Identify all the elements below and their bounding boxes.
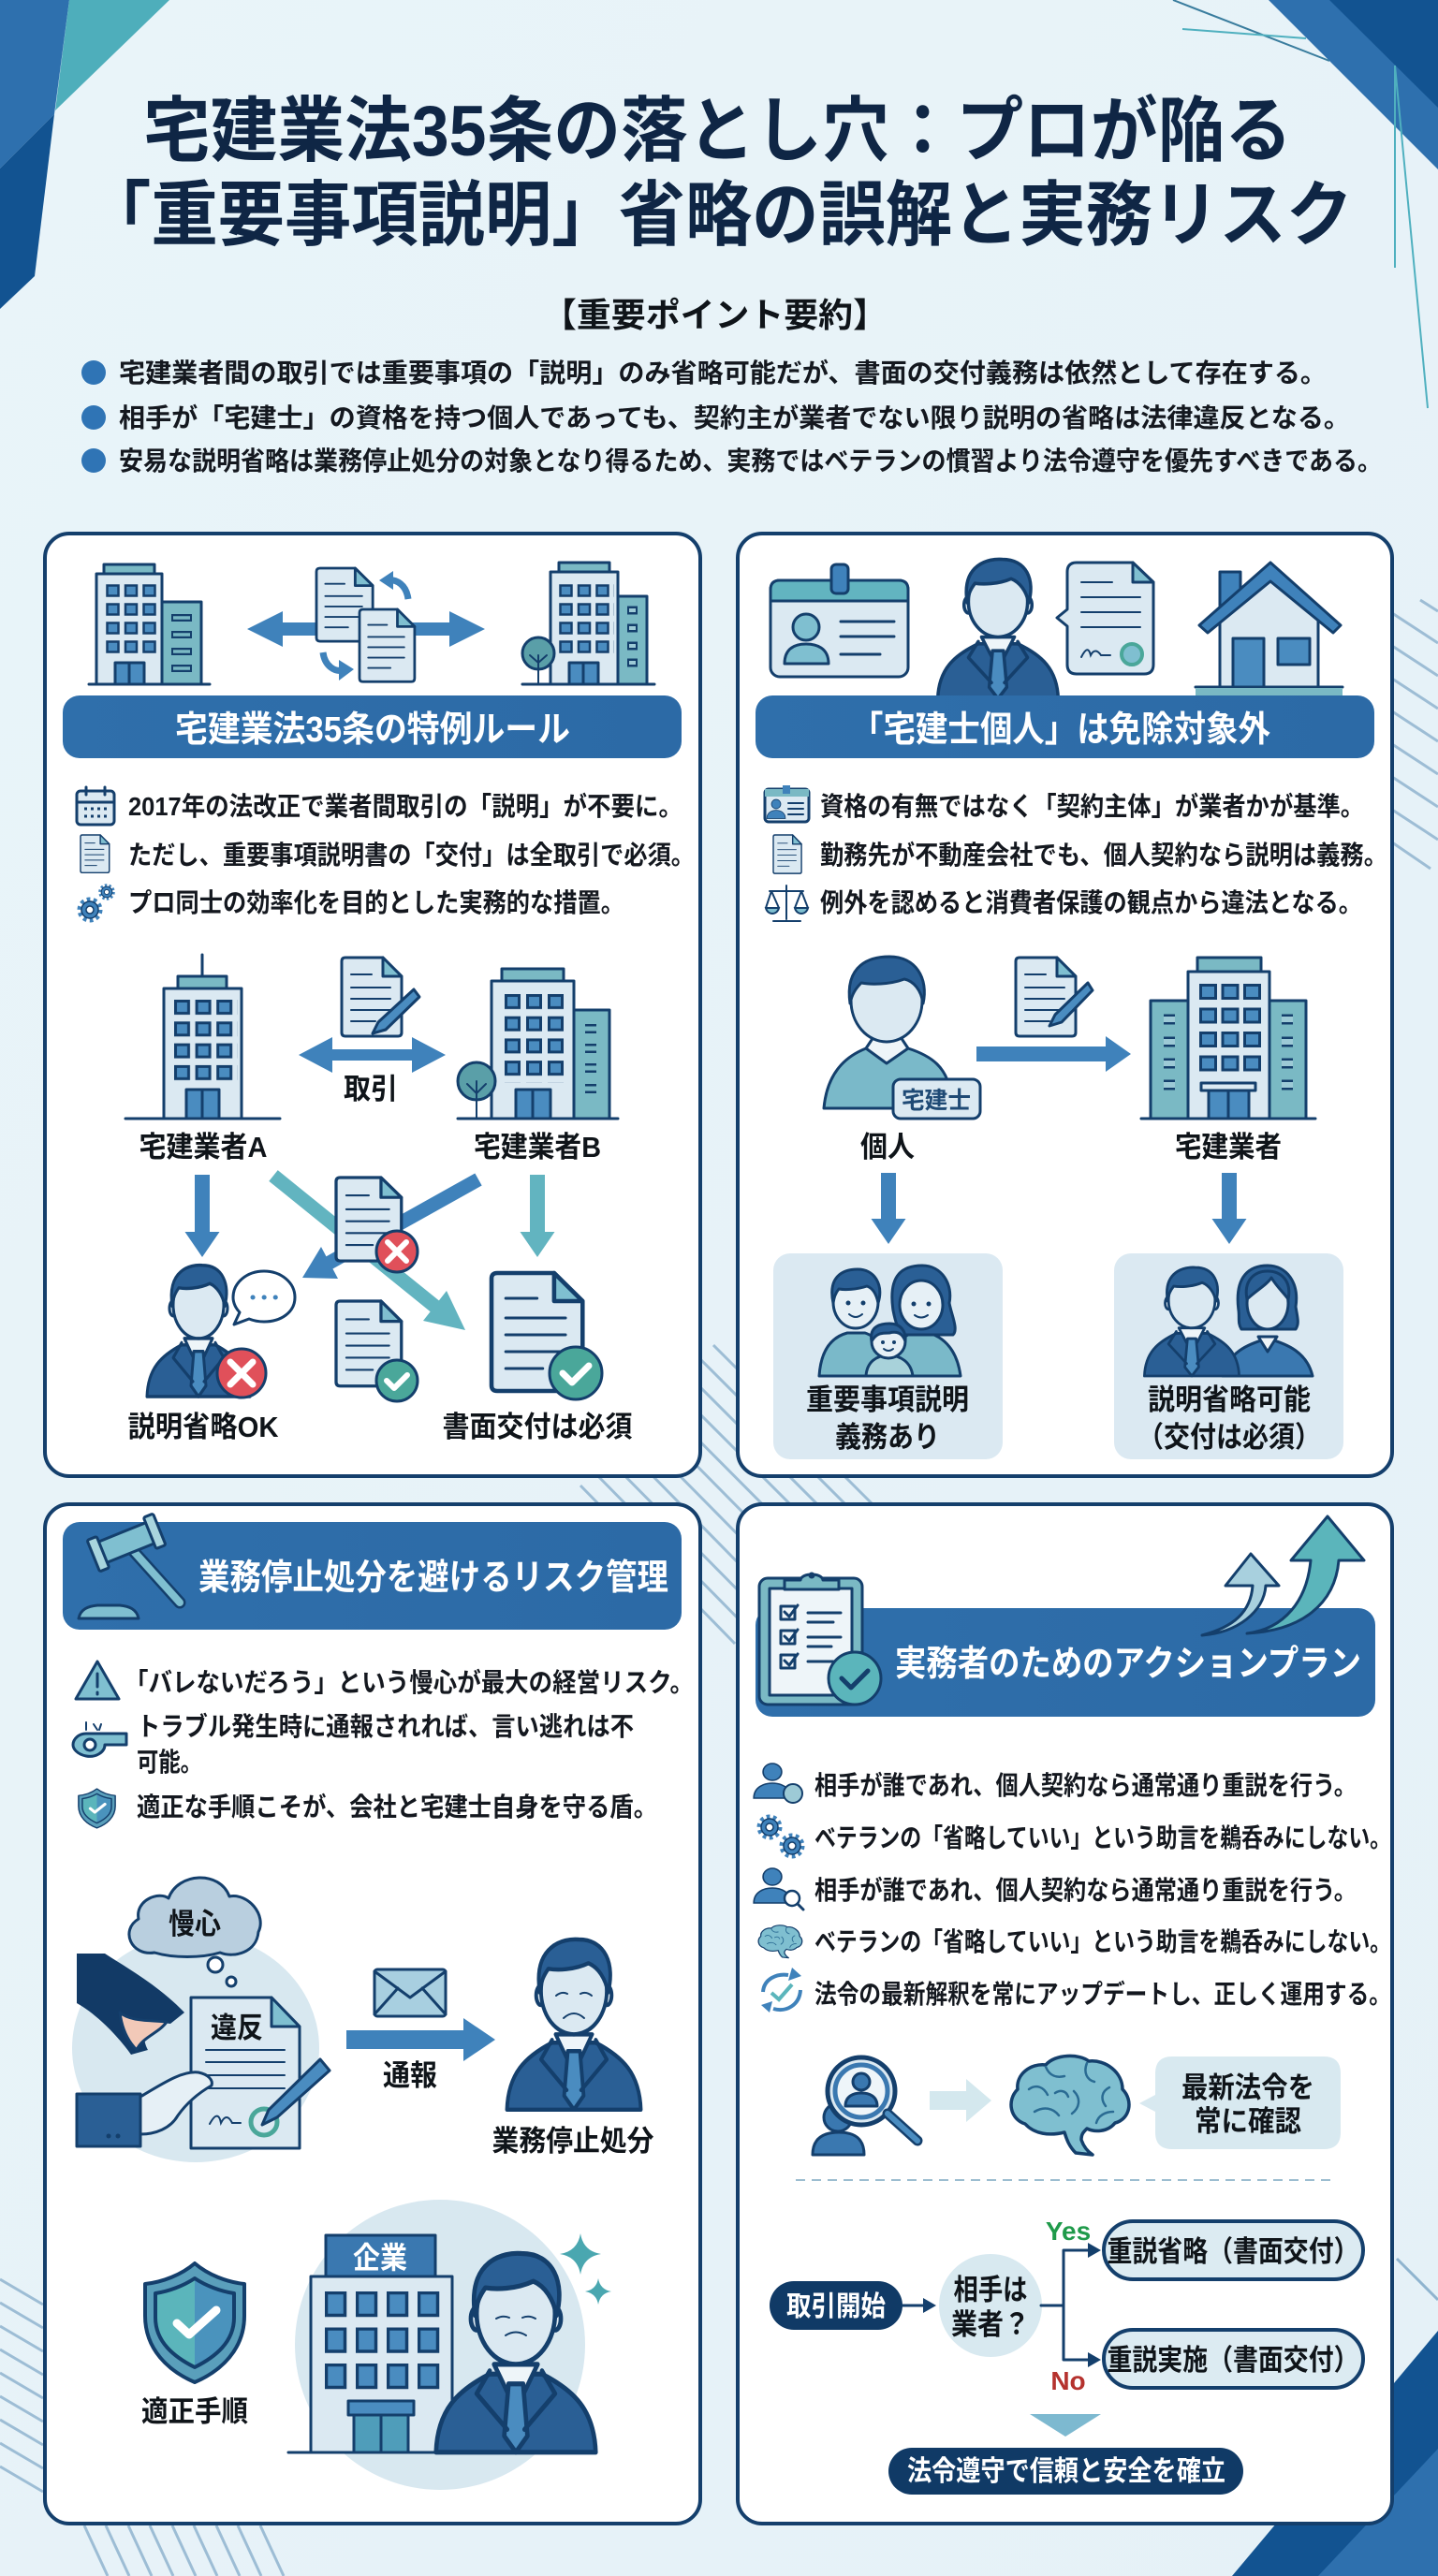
arrow: individual to company xyxy=(976,1036,1131,1072)
callout: 重要事項説明義務あり xyxy=(773,1253,1003,1459)
icon: house xyxy=(1196,563,1343,695)
callout: 最新法令を常に確認: 常に確認 xyxy=(1195,2105,1301,2138)
label: 義務あり: 義務あり xyxy=(835,1421,940,1454)
list item 2: ただし、重要事項説明書の「交付」は全取引で必須。 xyxy=(128,841,695,870)
bullet 3: 安易な説明省略は業務停止処分の対象となり得るため、実務ではベテランの慣習より法令遵守を優先すべきである。 xyxy=(119,446,1382,476)
list item 1 xyxy=(77,787,682,825)
label: 通報: 通報 xyxy=(383,2059,437,2092)
illustration: violation xyxy=(72,1878,330,2162)
list item 1: 相手が誰であれ、個人契約なら通常通り重説を行う。 xyxy=(814,1770,1357,1800)
callout: 説明省略可能 xyxy=(1114,1253,1343,1459)
list item 3: プロ同士の効率化を目的とした実務的な措置。 xyxy=(128,888,624,917)
conclusion pill xyxy=(888,2448,1243,2495)
summary: key points xyxy=(81,296,1382,476)
company sign: 企業 xyxy=(353,2241,407,2275)
panel: アクションプラン xyxy=(738,1504,1392,2524)
list item 2: トラブル発生時に通報されれば、言い逃れは不 xyxy=(137,1711,634,1741)
icon: sad business person xyxy=(507,1939,640,2110)
sparkle small xyxy=(585,2278,611,2305)
heading: 業務停止処分を避けるリスク管理 xyxy=(63,1514,682,1630)
list item 1 xyxy=(754,1764,1357,1803)
arrow: A down xyxy=(185,1175,219,1257)
triangle arrow xyxy=(1030,2414,1101,2437)
list item 3 xyxy=(766,886,1362,921)
icon: person in suit xyxy=(938,559,1058,698)
list item 3 xyxy=(754,1868,1357,1910)
sparkle large xyxy=(560,2233,601,2275)
icon: two business people xyxy=(1144,1266,1313,1376)
label: 適正手順: 適正手順 xyxy=(141,2395,248,2428)
icon: 宅建業者B building xyxy=(458,969,618,1119)
icon: individual with license: 宅建士 xyxy=(902,1088,971,1114)
arrow: individual down xyxy=(871,1173,906,1244)
arrow: A to document required xyxy=(273,1176,465,1330)
list item 3 xyxy=(79,1789,657,1828)
label: 重要事項説明: 重要事項説明 xyxy=(806,1383,969,1416)
icon: family xyxy=(819,1266,961,1376)
arrow: small rising xyxy=(1202,1554,1279,1635)
decision: 相手は業者?: 相手は xyxy=(953,2274,1028,2306)
label: 宅建業者B: 宅建業者B xyxy=(474,1131,601,1164)
dark sleeve hand xyxy=(77,1954,184,2055)
icon: building right xyxy=(522,563,654,684)
icon: large document with check xyxy=(492,1273,602,1399)
icon: envelope xyxy=(374,1969,446,2016)
icon: document with check xyxy=(336,1301,418,1401)
panel: 35条の特例ルール xyxy=(45,534,700,1476)
icon: 宅建業者A building xyxy=(125,955,280,1119)
label: Yes: Yes xyxy=(1046,2217,1091,2246)
label: 宅建業者A: 宅建業者A xyxy=(139,1131,268,1164)
heading: 実務者のためのアクションプラン: 実務者のためのアクションプラン xyxy=(895,1645,1361,1684)
list item 1: 2017年の法改正で業者間取引の「説明」が不要に。 xyxy=(128,791,682,821)
title xyxy=(84,92,1353,256)
list item 3: 適正な手順こそが、会社と宅建士自身を守る盾。 xyxy=(137,1792,657,1822)
icon: document with pen xyxy=(342,958,419,1036)
heading: 35条の特例ルール xyxy=(63,695,682,758)
arrow: transaction xyxy=(299,1037,446,1073)
list item 1: 「バレないだろう」という慢心が最大の経営リスク。 xyxy=(125,1667,694,1697)
company sign xyxy=(326,2235,435,2276)
label: 説明省略OK: 説明省略OK xyxy=(127,1411,279,1443)
label: 交付は必須: （交付は必須） xyxy=(1137,1421,1321,1454)
icon: document with pen xyxy=(1016,958,1093,1036)
panel: リスク管理 xyxy=(45,1504,700,2524)
icon: license card xyxy=(770,564,908,677)
list item 2 xyxy=(759,1817,1391,1856)
icon: shield xyxy=(145,2263,244,2382)
list item 2 xyxy=(81,835,695,872)
icon: exchanged documents xyxy=(316,568,415,681)
list item 2 xyxy=(773,835,1387,873)
result pill: 重説実施 xyxy=(1104,2330,1363,2388)
arrow: large rising xyxy=(1247,1516,1364,1633)
result pill: 重説省略: 重説省略（書面交付） xyxy=(1107,2235,1359,2268)
panel: 宅建士個人は免除対象外 xyxy=(738,534,1392,1476)
list item 2: 可能。 xyxy=(137,1748,202,1777)
icon: checklist clipboard xyxy=(759,1573,881,1705)
list item 1: 資格の有無ではなく「契約主体」が業者かが基準。 xyxy=(820,791,1364,821)
heading: 業務停止処分を避けるリスク管理: 業務停止処分を避けるリスク管理 xyxy=(198,1559,668,1598)
callout: 最新法令を常に確認 xyxy=(1139,2056,1341,2149)
list item 5 xyxy=(761,1968,1391,2012)
thought cloud: 慢心: 慢心 xyxy=(169,1908,221,1940)
flow arrow xyxy=(902,2298,936,2313)
label: 説明省略可能: 説明省略可能 xyxy=(1148,1383,1311,1416)
heading: 35条の特例ルール: 宅建業法35条の特例ルール xyxy=(175,710,570,750)
heading: 免除対象外 xyxy=(756,695,1374,758)
arrow: report xyxy=(346,2018,495,2061)
list item 3: 相手が誰であれ、個人契約なら通常通り重説を行う。 xyxy=(814,1875,1357,1905)
flowchart xyxy=(770,2217,1363,2495)
list item 2: 勤務先が不動産会社でも、個人契約なら説明は義務。 xyxy=(820,840,1387,870)
arrow: pale xyxy=(930,2079,991,2122)
callout: 最新法令を常に確認: 最新法令を xyxy=(1181,2071,1314,2104)
start pill: 取引開始: 取引開始 xyxy=(786,2291,886,2322)
label: 書面交付は必須: 書面交付は必須 xyxy=(442,1411,633,1443)
result pill: 重説省略 xyxy=(1104,2221,1363,2279)
title: 「重要事項説明」省略の誤解と実務リスク xyxy=(84,176,1353,256)
arrow: exchange between companies xyxy=(247,611,485,647)
result pill: 重説実施: 重説実施（書面交付） xyxy=(1107,2344,1359,2377)
label: 取引: 取引 xyxy=(344,1073,398,1105)
icon: gavel xyxy=(79,1514,180,1618)
bullet 2: 相手が「宅建士」の資格を持つ個人であっても、契約主が業者でない限り説明の省略は法律違反となる。 xyxy=(119,402,1350,432)
illustration: company and person xyxy=(288,2200,611,2490)
title: 宅建業法35条の落とし穴：プロが陥る xyxy=(143,92,1292,171)
label: 個人: 個人 xyxy=(860,1131,915,1164)
branch arrows xyxy=(1041,2243,1101,2367)
arrow: company down xyxy=(1211,1173,1247,1244)
list item 3: 例外を認めると消費者保護の観点から違法となる。 xyxy=(820,888,1362,917)
list item 1 xyxy=(76,1661,694,1699)
label: No: No xyxy=(1050,2366,1086,2395)
icon: individual with license xyxy=(824,957,980,1119)
list item 2 xyxy=(73,1711,634,1777)
hand holding document xyxy=(77,2072,212,2146)
heading: 実務者のためのアクションプラン xyxy=(756,1608,1375,1717)
icon: document with x xyxy=(336,1178,418,1272)
conclusion pill: 法令遵守で信頼と安全を確立 xyxy=(907,2456,1225,2487)
decision: 相手は業者?: 業者？ xyxy=(951,2308,1030,2341)
list item 1 xyxy=(765,785,1364,822)
label: 業務停止処分: 業務停止処分 xyxy=(492,2125,653,2158)
icon: brain xyxy=(1011,2056,1129,2155)
document: 違反 xyxy=(191,1998,300,2148)
arrow: B down xyxy=(521,1175,554,1257)
thought cloud: 慢心 xyxy=(129,1878,260,1986)
label: 宅建業者: 宅建業者 xyxy=(1175,1131,1282,1164)
bullet 1: 宅建業者間の取引では重要事項の「説明」のみ省略可能だが、書面の交付義務は依然として存在する。 xyxy=(119,358,1327,388)
start pill: 取引開始 xyxy=(770,2281,902,2330)
icon: company building xyxy=(1141,958,1315,1119)
summary heading: 【重要ポイント要約】 xyxy=(542,296,888,334)
decision: 相手は業者? xyxy=(939,2254,1042,2357)
icon: building left xyxy=(89,564,210,684)
icon: person under magnifier xyxy=(813,2057,917,2155)
pen xyxy=(262,2059,330,2125)
icon: contract speech bubble xyxy=(1057,563,1153,674)
arrow: B to explanation omitted xyxy=(302,1179,478,1279)
icon: business person with x xyxy=(147,1266,295,1398)
heading: 免除対象外: 「宅建士個人」は免除対象外 xyxy=(851,710,1270,750)
document: 違反: 違反 xyxy=(211,2012,263,2044)
